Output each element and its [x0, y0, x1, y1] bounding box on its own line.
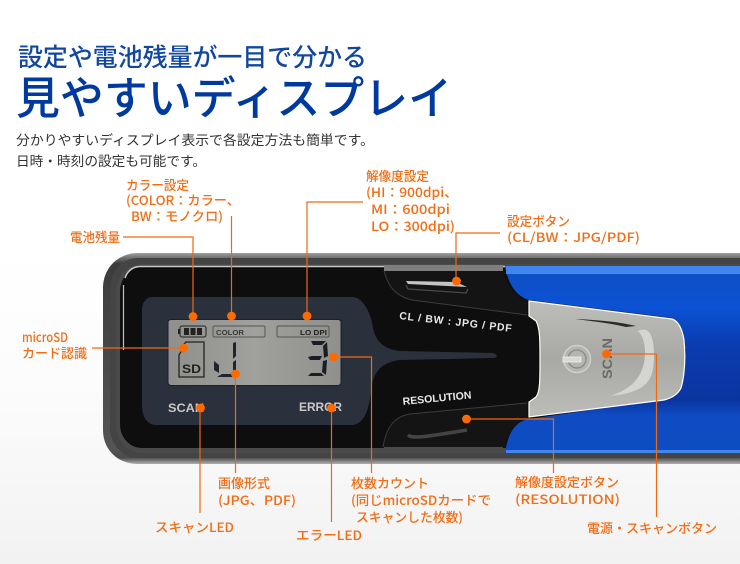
- background: [0, 250, 740, 564]
- callout: microSD: microSD: [22, 327, 68, 346]
- callout: resolution setting: [303, 166, 458, 320]
- callout: color setting: [126, 175, 240, 320]
- callout: error LED: [296, 404, 362, 544]
- heading: subtitle: 設定や電池残量が一目で分かる: [18, 38, 367, 74]
- callout: page count: [329, 353, 491, 526]
- intro text: 日時・時刻の設定も可能です。: [16, 150, 206, 170]
- callout: power scan button: [587, 350, 717, 537]
- callout: power scan button: 電源・スキャンボタン: [587, 518, 717, 537]
- callout: resolution button: [462, 415, 620, 508]
- scanner shell: [103, 253, 740, 464]
- LCD screen: [168, 320, 341, 386]
- callout: setting button: (CL/BW：JPG/PDF): [507, 227, 640, 246]
- callout: resolution setting: (HI：900dpi、: [366, 182, 458, 201]
- heading: main title: 見やすいディスプレイ: [16, 62, 452, 127]
- icon: battery: [178, 326, 206, 337]
- icon: SD card: [179, 342, 204, 377]
- intro text: 分かりやすいディスプレイ表示で各設定方法も簡単です。: [16, 129, 374, 149]
- indicator: LO DPI: [277, 326, 329, 337]
- bottom button: [383, 403, 527, 452]
- callout: resolution button: 解像度設定ボタン: [515, 472, 619, 491]
- callout: color setting: (COLOR：カラー、: [126, 190, 240, 209]
- callout: microSD: カード認識: [22, 343, 87, 362]
- callout: resolution setting: LO：300dpi): [371, 216, 455, 235]
- label: SCAN on button: SCAN: [599, 338, 615, 379]
- label: SCAN LED: SCAN: [168, 403, 204, 415]
- indicator: COLOR: COLOR: [216, 328, 245, 337]
- callout: color setting: BW：モノクロ): [131, 206, 223, 225]
- callout: scan LED: [155, 404, 234, 536]
- callout: setting button: 設定ボタン: [507, 211, 570, 230]
- callout: scan LED: スキャンLED: [155, 517, 234, 536]
- label: CL/BW JPG/PDF: CL / BW : JPG / PDF: [399, 310, 513, 335]
- scanner device: [103, 253, 740, 464]
- callout: image format: 画像形式: [218, 473, 270, 492]
- intro text: [16, 129, 374, 170]
- segment digits: format: [214, 342, 236, 377]
- label: RESOLUTION: RESOLUTION: [402, 389, 472, 408]
- blue body: [505, 266, 740, 453]
- top button: [384, 265, 527, 315]
- callout: resolution setting: MI：600dpi: [371, 199, 450, 218]
- callout: color setting: カラー設定: [126, 175, 189, 194]
- icon: SD card: SD: [182, 362, 201, 376]
- callout: image format: (JPG、PDF): [218, 490, 296, 509]
- callout: image format: [218, 370, 296, 509]
- callout: battery: [70, 227, 197, 321]
- callout: resolution button: (RESOLUTION): [515, 489, 620, 508]
- callout: setting button: [452, 211, 640, 285]
- segment digit: count: [308, 341, 328, 376]
- indicator: COLOR: [213, 326, 265, 337]
- silver scan button: [529, 301, 685, 417]
- callout: page count: 枚数カウント: [351, 473, 429, 492]
- indicator: LO DPI: LO DPI: [300, 328, 327, 337]
- LCD dark panel: [142, 297, 497, 425]
- callout: microSD: [22, 327, 188, 362]
- callout: resolution setting: 解像度設定: [366, 166, 429, 185]
- callout: battery: 電池残量: [70, 227, 120, 246]
- callout: page count: スキャンした枚数): [356, 507, 463, 526]
- icon: power: [563, 346, 590, 372]
- callout: error LED: エラーLED: [296, 525, 362, 544]
- callout: page count: (同じmicroSDカードで: [351, 490, 491, 509]
- label: ERROR LED: ERROR: [299, 402, 343, 414]
- scanner black face: [120, 267, 740, 448]
